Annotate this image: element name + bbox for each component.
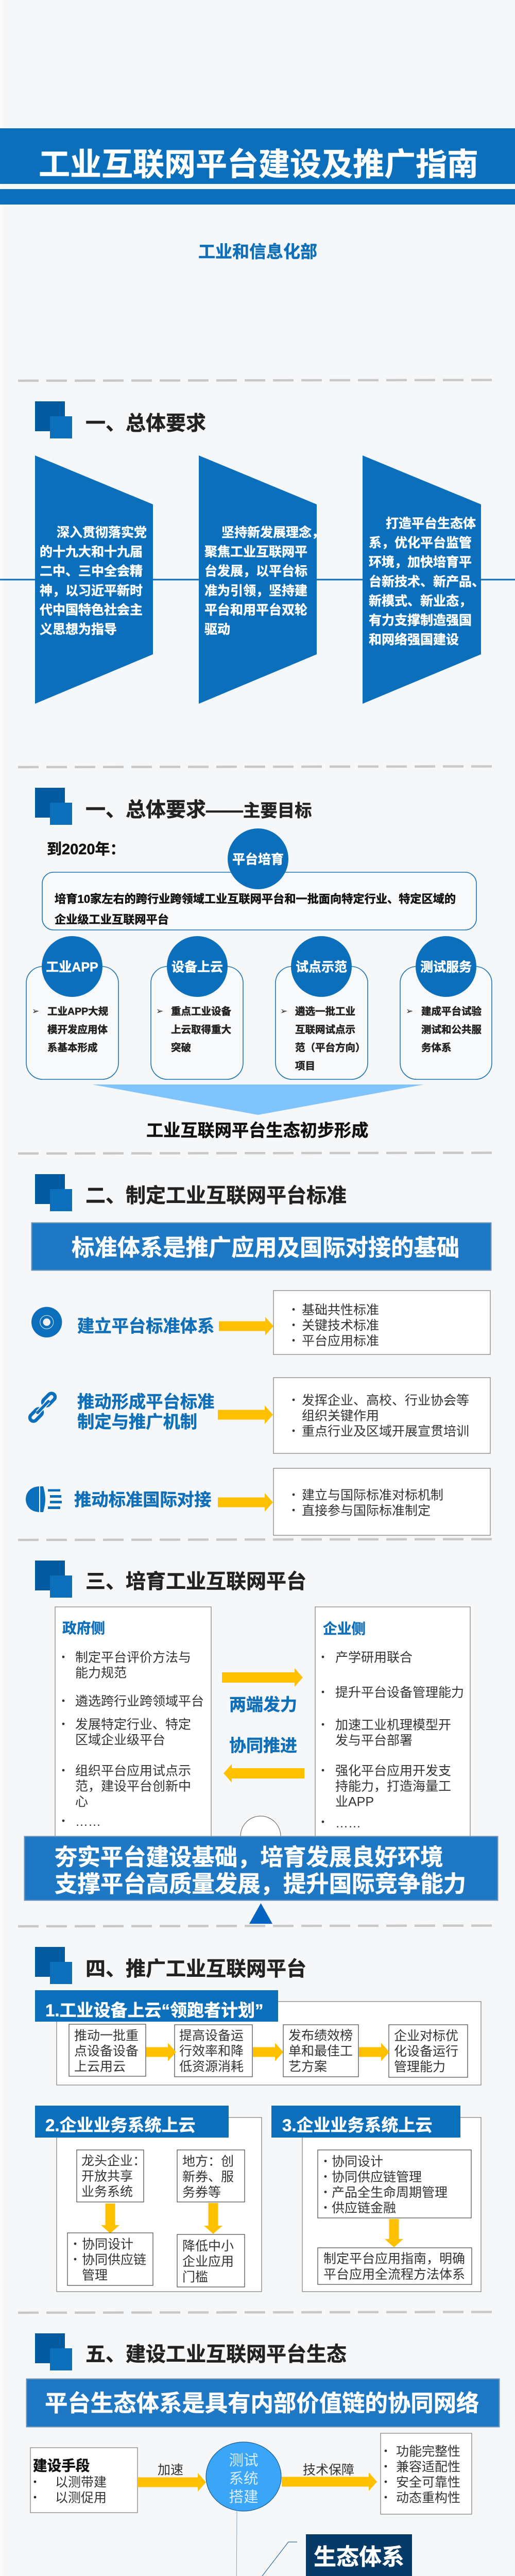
panel: enterprise side: 强化平台应用开发支: [335, 1764, 451, 1778]
list box: [273, 1291, 490, 1354]
heading: section 5: 五、建设工业互联网平台生态: [85, 2344, 347, 2366]
arrow: technical assurance: [282, 2463, 377, 2491]
box: construction means: 以测促用: [55, 2490, 107, 2505]
icon: half disc with lines: [26, 1486, 62, 1512]
list box: 发挥企业、高校、行业协会等: [302, 1393, 469, 1408]
heading: section 4: 四、推广工业互联网平台: [85, 1958, 306, 1980]
step 3: 艺方案: [288, 2060, 327, 2074]
box: collaboration list: [67, 2233, 153, 2285]
panel: enterprise side: 发与平台部署: [335, 1733, 413, 1748]
box: list: 协同供应链管理: [332, 2170, 422, 2184]
panel: pilot demonstration: 项目: [295, 1060, 315, 1072]
card: new development concept: 准为引领，坚持建: [204, 584, 307, 598]
panel: enterprise business systems to cloud (2): [35, 2106, 262, 2292]
box: collaboration list: 协同供应链: [82, 2252, 146, 2267]
panel: equipment to cloud: 突破: [171, 1042, 191, 1054]
step 1: 上云用云: [74, 2060, 126, 2074]
panel: enterprise side: 产学研用联合: [335, 1651, 413, 1665]
row: standard making and promotion mechanism: 推动形成平台标准: [77, 1393, 214, 1412]
node: test system build: 系统: [229, 2471, 259, 2487]
step 4: 化设备运行: [394, 2044, 458, 2059]
box: application guide: [318, 2248, 472, 2284]
panel: enterprise business systems to cloud (3): [271, 2106, 481, 2292]
panel: testing services: ➢: [406, 1006, 413, 1016]
banner: ecosystem: 平台生态体系是具有内部价值链的协同网络: [45, 2391, 479, 2416]
panel: testing services: [400, 936, 492, 1079]
tab heading: [35, 1990, 278, 2022]
card: platform ecosystem: [363, 455, 485, 704]
tab heading: [35, 2106, 229, 2138]
panel: industrial APP: 模开发应用体: [47, 1024, 108, 1036]
heading: section 1: 一、总体要求: [85, 413, 206, 435]
box: lower SME threshold: 企业应用: [182, 2255, 234, 2269]
list box: 平台应用标准: [302, 1334, 379, 1348]
panel: enterprise side: ……: [335, 1816, 361, 1831]
panel: equipment to cloud: 上云取得重大: [171, 1024, 231, 1036]
list box: 建立与国际标准对标机制: [302, 1488, 443, 1502]
step 1: [69, 2024, 146, 2076]
title banner: [0, 128, 515, 205]
panel: equipment to cloud: 重点工业设备: [171, 1006, 231, 1017]
arrow: right: [222, 1668, 303, 1687]
list box: 重点行业及区域开展宣贯培训: [302, 1424, 469, 1438]
card: new development concept: 坚持新发展理念，: [221, 525, 324, 540]
card: guiding thought: 代中国特色社会主: [40, 603, 143, 617]
panel: enterprise side: 业APP: [335, 1795, 374, 1809]
box: list: 供应链金融: [332, 2201, 396, 2215]
card: platform ecosystem: 系，优化平台监管: [369, 535, 472, 550]
node: test system build: [206, 2442, 281, 2511]
box: quality attributes: 动态重构性: [396, 2490, 460, 2505]
panel: equipment to cloud: [151, 936, 243, 1079]
list box: 直接参与国际标准制定: [302, 1503, 431, 1518]
label: ecosystem: 生态体系: [314, 2545, 404, 2570]
node: test system build: 测试: [229, 2452, 259, 2469]
step 4: [389, 2025, 468, 2077]
arrow: accelerate: 加速: [158, 2463, 183, 2477]
panel: enterprise side: 持能力，打造海量工: [335, 1780, 451, 1794]
step 3: [283, 2025, 358, 2077]
panel: testing services: 建成平台试验: [421, 1006, 482, 1017]
panel: pilot demonstration: 试点示范: [296, 960, 347, 975]
heading: section 3: [35, 1561, 306, 1598]
banner: ecosystem: [27, 2379, 500, 2427]
step 2: [175, 2025, 252, 2077]
panel: government side: 心: [75, 1795, 88, 1809]
banner: standards: 标准体系是推广应用及国际对接的基础: [72, 1235, 459, 1261]
line: test system to cube: [236, 2511, 237, 2576]
panel: equipment to cloud: ➢: [156, 1006, 163, 1016]
step 4: 管理能力: [394, 2060, 445, 2074]
label: coordinated advance: 协同推进: [229, 1736, 297, 1755]
leader line: [257, 2542, 297, 2576]
step 2: 行效率和降: [179, 2044, 244, 2059]
heading: section 1 main goals: 一、总体要求——主要目标: [85, 799, 312, 821]
box: quality attributes: 兼容适配性: [396, 2460, 460, 2474]
box: quality attributes: 安全可靠性: [396, 2475, 460, 2489]
arrow: [385, 2219, 403, 2247]
panel: government side: 遴选跨行业跨领域平台: [75, 1694, 204, 1708]
box: local government: 地方：创: [182, 2155, 234, 2169]
row: standard making and promotion mechanism: 制定与推广机制: [77, 1413, 197, 1432]
box: construction means: 建设手段: [33, 2458, 90, 2474]
panel: enterprise side: 企业侧: [323, 1621, 366, 1637]
card: platform ecosystem: 和网络强国建设: [369, 633, 459, 647]
panel: government side: 组织平台应用试点示: [75, 1764, 191, 1778]
panel: pilot demonstration: 范（平台方向）: [295, 1042, 366, 1054]
tab heading: [271, 2106, 460, 2138]
heading: section 2: [35, 1174, 347, 1211]
step 1: 点设备设备: [74, 2044, 139, 2059]
panel: government side: ……: [75, 1815, 101, 1829]
semicircle node: [241, 1816, 281, 1856]
panel: government side: 能力规范: [75, 1666, 127, 1681]
panel: testing services: 务体系: [421, 1042, 452, 1054]
box: leading enterprises: [77, 2150, 146, 2202]
box: list: [318, 2150, 471, 2218]
arrow: [218, 1405, 273, 1424]
box: local government: 务券等: [182, 2185, 221, 2200]
banner: section 3 conclusion: 夯实平台建设基础，培育发展良好环境: [55, 1845, 443, 1870]
box: local government: 新券、服: [182, 2170, 234, 2184]
panel: platform cultivation: [42, 828, 476, 930]
step 4: 企业对标优: [394, 2029, 458, 2043]
heading: section 1 main goals: [35, 788, 312, 825]
panel: testing services: 测试和公共服: [421, 1024, 482, 1036]
panel: equipment to cloud: 设备上云: [171, 960, 223, 975]
panel: industrial APP: 工业APP大规: [47, 1006, 108, 1017]
list box: 组织关键作用: [302, 1409, 379, 1423]
arrow: [219, 1317, 273, 1335]
list box: [273, 1468, 490, 1535]
panel: pilot demonstration: 遴选一批工业: [295, 1006, 355, 1017]
arrow: accelerate: [138, 2463, 206, 2492]
tab heading: 1.工业设备上云“领跑者计划”: [45, 2001, 264, 2020]
panel: three general requirements: [0, 455, 515, 704]
heading: section 1: [35, 401, 206, 438]
box: quality attributes: 功能完整性: [396, 2444, 460, 2459]
card: guiding thought: [35, 455, 153, 704]
box: construction means: [30, 2448, 138, 2513]
box: application guide: 制定平台应用指南，明确: [323, 2251, 465, 2266]
panel: enterprise side: 提升平台设备管理能力: [335, 1686, 464, 1700]
card: platform ecosystem: 台新技术、新产品、: [369, 574, 485, 589]
heading: section 3: 三、培育工业互联网平台: [85, 1571, 306, 1593]
label: ecosystem: [306, 2534, 412, 2576]
panel: government side: 范，建设平台创新中: [75, 1780, 191, 1794]
panel: enterprise side: 加速工业机理模型开: [335, 1718, 451, 1732]
panel: industrial APP: [26, 936, 118, 1079]
card: guiding thought: 深入贯彻落实党: [57, 526, 147, 540]
badge: platform cultivation: [228, 828, 288, 889]
box: leading enterprises: 龙头企业：: [81, 2154, 146, 2168]
panel: government side: 制定平台评价方法与: [75, 1651, 191, 1665]
box: leading enterprises: 业务系统: [81, 2184, 133, 2199]
conclusion: ecosystem initially formed: 工业互联网平台生态初步形成: [146, 1121, 368, 1141]
card: guiding thought: 二中、三中全会精: [40, 564, 143, 579]
tab heading: 2.企业业务系统上云: [45, 2115, 196, 2135]
icon: chain link: [28, 1392, 57, 1422]
step 3: 发布绩效榜: [288, 2029, 353, 2043]
node: test system build: 搭建: [229, 2489, 259, 2505]
card: platform ecosystem: 打造平台生态体: [386, 516, 476, 531]
panel: government side: [55, 1607, 211, 1839]
arrows: [101, 2203, 222, 2234]
list box: 基础共性标准: [302, 1303, 379, 1317]
box: leading enterprises: 开放共享: [81, 2169, 133, 2183]
label: by 2020: 到2020年：: [47, 841, 125, 858]
banner: section 3 conclusion: [25, 1836, 497, 1900]
card: platform ecosystem: 有力支撑制造强国: [369, 613, 472, 628]
box: lower SME threshold: 门槛: [182, 2270, 208, 2284]
box: construction means: 以测带建: [55, 2475, 107, 2489]
box: lower SME threshold: [177, 2234, 245, 2287]
box: lower SME threshold: 降低中小: [182, 2239, 234, 2253]
banner: section 3 conclusion: 支撑平台高质量发展，提升国际竞争能力: [55, 1872, 466, 1897]
panel: enterprise side: [315, 1607, 470, 1839]
card: new development concept: 台发展，以平台标: [204, 564, 307, 579]
heading: section 5: [35, 2333, 347, 2370]
arrow: technical assurance: 技术保障: [303, 2463, 354, 2477]
card: guiding thought: 义思想为指导: [40, 622, 117, 637]
card: new development concept: 驱动: [204, 622, 230, 637]
row: international alignment of standards: [26, 1468, 490, 1535]
panel: pilot demonstration: [276, 936, 368, 1079]
panel: pilot demonstration: ➢: [280, 1006, 287, 1016]
step 3: 单和最佳工: [288, 2044, 353, 2059]
heading: section 4: [35, 1947, 306, 1984]
row: standard making and promotion mechanism: [28, 1378, 490, 1453]
step 1: 推动一批重: [74, 2029, 139, 2043]
card: guiding thought: 的十九大和十九届: [40, 545, 143, 560]
list box: [273, 1378, 490, 1453]
step 2: 低资源消耗: [179, 2060, 244, 2074]
card: platform ecosystem: 新模式、新业态，: [369, 594, 472, 608]
row: international alignment of standards: 推动标准国际对接: [74, 1491, 211, 1510]
card: new development concept: 聚焦工业互联网平: [204, 545, 307, 560]
box: application guide: 平台应用全流程方法体系: [323, 2267, 465, 2282]
row: build platform standard system: [31, 1291, 490, 1354]
panel: pilot demonstration: 互联网试点示: [295, 1024, 355, 1036]
box: list: 协同设计: [332, 2155, 383, 2169]
card: platform ecosystem: 环境，加快培育平: [369, 555, 472, 570]
panel: government side: 政府侧: [62, 1620, 105, 1636]
panel: platform cultivation: 培育10家左右的跨行业跨领域工业互联网平台和一批面向特定行业、特定区域的: [55, 892, 456, 906]
box: quality attributes: [381, 2433, 472, 2514]
panel: government side: 区域企业级平台: [75, 1733, 165, 1748]
panel: industrial APP: 系基本形成: [47, 1042, 98, 1054]
panel: industrial APP: ➢: [32, 1006, 39, 1016]
panel: testing services: 测试服务: [420, 960, 472, 975]
badge: platform cultivation: 平台培育: [232, 852, 284, 867]
panel: government side: 发展特定行业、特定: [75, 1718, 191, 1732]
publisher subtitle: 工业和信息化部: [198, 242, 317, 261]
panel: equipment to cloud leader plan: [35, 1990, 481, 2085]
panel: platform cultivation: 企业级工业互联网平台: [55, 913, 169, 926]
card: new development concept: [199, 455, 324, 704]
title banner: 工业互联网平台建设及推广指南: [39, 147, 478, 182]
list box: 关键技术标准: [302, 1318, 379, 1333]
arrow: converge triangle: [92, 1084, 424, 1115]
step 2: 提高设备运: [179, 2029, 244, 2043]
arrow: [218, 1493, 273, 1512]
arrow: left: [224, 1764, 304, 1783]
panel: industrial APP: 工业APP: [46, 960, 98, 975]
box: local government: [177, 2150, 245, 2202]
card: new development concept: 平台和用平台双轮: [204, 602, 307, 617]
triangle pointer: [249, 1903, 272, 1924]
icon: disc: [31, 1307, 62, 1337]
heading: section 2: 二、制定工业互联网平台标准: [85, 1185, 347, 1207]
box: list: 产品全生命周期管理: [332, 2185, 448, 2200]
box: collaboration list: 协同设计: [82, 2237, 133, 2251]
tab heading: 3.企业业务系统上云: [282, 2115, 433, 2135]
box: collaboration list: 管理: [82, 2268, 108, 2282]
banner: standards: [32, 1223, 491, 1270]
row: build platform standard system: 建立平台标准体系: [77, 1317, 214, 1336]
flow arrows: [146, 2043, 389, 2061]
card: guiding thought: 神，以习近平新时: [40, 584, 143, 598]
label: two-end effort: 两端发力: [229, 1695, 297, 1714]
